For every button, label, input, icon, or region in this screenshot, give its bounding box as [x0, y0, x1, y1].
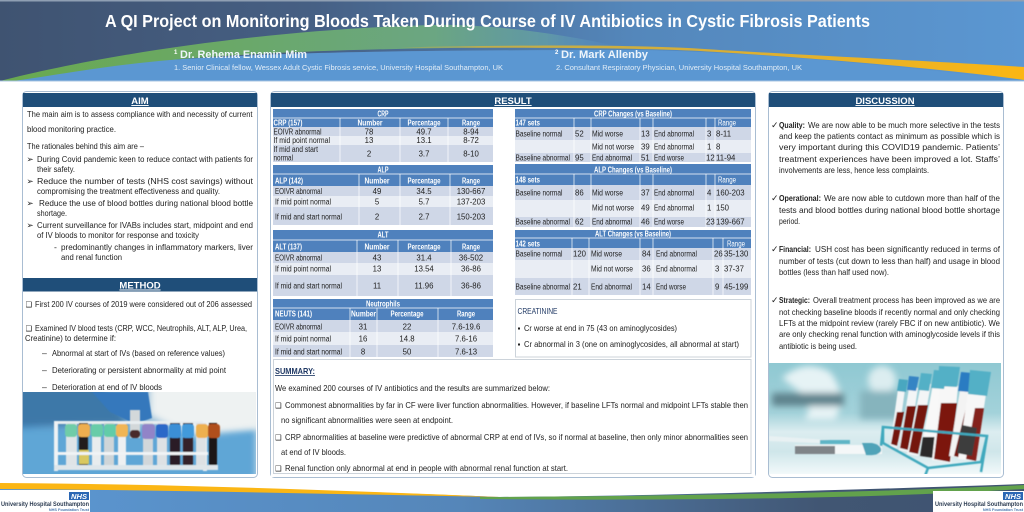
point: strategic: LFTs at the midpoint review (rarely FBC if on new antibiotic). We — [779, 318, 1000, 328]
table: ALT changes: 26 — [714, 250, 723, 258]
method text: ❑ — [26, 300, 32, 309]
table: ALT: 36-502 — [459, 254, 483, 262]
table: CRP changes: 51 — [641, 154, 650, 162]
logo: University Hospital Southampton left: University Hospital Southampton — [1, 502, 89, 508]
aim text: Reduce the number of tests (NHS cost savings) without — [37, 176, 254, 186]
table: Neutrophils: 7.6-16 — [455, 334, 477, 344]
table: ALT changes: Mid not worse — [591, 264, 633, 274]
table: Neutrophils: Range — [457, 310, 475, 318]
author 1 — [174, 49, 503, 72]
table: ALP: 5.7 — [419, 198, 429, 206]
panel: discussion — [768, 92, 1004, 478]
table: Neutrophils: 31 — [359, 322, 367, 332]
aim text: ➢ — [26, 221, 34, 231]
table: CRP changes: 147 sets — [516, 118, 541, 128]
aim text: The rationales behind this aim are – — [27, 141, 144, 151]
aim text: The main aim is to assess compliance with and necessity of current — [27, 109, 253, 119]
table: ALT changes: End worse — [656, 282, 686, 292]
table: CRP changes: 8 — [716, 142, 720, 152]
table: ALP changes: 23 — [706, 218, 715, 226]
table: ALP changes: 139-667 — [716, 218, 745, 226]
table: CRP — [273, 109, 493, 162]
method text: Deteriorating or persistent abnormality at mid point — [52, 365, 227, 375]
table: ALP: ALP (142) — [275, 176, 303, 186]
table: ALT changes: 35-130 — [724, 250, 749, 258]
table: ALP changes: End abnormal — [592, 218, 632, 226]
table: ALP: EOIVR abnormal — [275, 187, 322, 196]
point: operational — [771, 193, 1000, 226]
aim text: ➢ — [26, 177, 34, 187]
header banner — [0, 0, 1024, 82]
table: CRP changes: 52 — [575, 130, 584, 138]
summary box: CRP abnormalities at baseline were predictive of abnormal CRP at end of IVs, so if normal at baseline, then only minor abnormalities seen — [285, 433, 748, 442]
point: financial: USH cost has been significantly reduced in terms of — [815, 244, 1001, 254]
table: CRP changes: 11-94 — [716, 154, 736, 162]
table: ALT: 36-86 — [461, 282, 481, 290]
method text: Deterioration at end of IV bloods — [52, 382, 163, 392]
point: operational: Operational: — [779, 193, 821, 203]
title: A QI Project on Monitoring Bloods Taken During Course of IV Antibiotics in Cystic Fibrosis Patients — [105, 11, 870, 31]
table: Neutrophils: Number — [351, 310, 376, 318]
table: CRP: EOIVR abnormal — [274, 128, 322, 136]
table: ALT: Number — [364, 242, 390, 252]
panel: aim and method — [15, 92, 262, 480]
table: ALP changes: 1 — [707, 204, 711, 212]
table: ALP: 150-203 — [457, 212, 485, 222]
table: ALP — [273, 165, 493, 225]
table: ALT: 13 — [373, 264, 381, 274]
callout: creatinine: Cr worse at end in 75 (43 on aminoglycosides) — [524, 324, 677, 333]
summary box: at end of IV bloods. — [281, 448, 346, 457]
table: CRP: 2 — [367, 150, 371, 158]
point: financial: ✓ — [771, 245, 779, 255]
author 2: Dr. Mark Allenby — [561, 49, 649, 61]
table: CRP changes: End abnormal — [592, 154, 632, 162]
table: ALT changes: End abnormal — [656, 264, 697, 274]
table: ALP changes: Range — [718, 176, 736, 184]
footer band — [0, 483, 1024, 512]
table: ALT changes: 14 — [642, 282, 651, 292]
table: ALT: 43 — [373, 254, 381, 262]
summary box: Commonest abnormalities by far in CF were liver function abnormalities. However, if baseline LFTs normal and midpoint LFTs stable then — [285, 401, 748, 410]
table: Neutrophils: 22 — [403, 322, 411, 332]
table: ALT changes: ALT Changes (vs Baseline) — [595, 230, 671, 238]
summary box: SUMMARY: — [275, 367, 315, 376]
logo: University Hospital Southampton right: NHS Foundation Trust — [983, 508, 1024, 512]
author 2: 2 — [555, 50, 559, 56]
table: CRP changes: Range — [718, 118, 736, 128]
table: Neutrophils: Percentage — [390, 310, 424, 318]
method text: ❑ — [26, 324, 32, 333]
table: Neutrophils: 7.6-19.6 — [452, 322, 480, 332]
point: quality: treatment experiences have been improved a lot. Staffs’ — [779, 154, 1000, 164]
table: CRP: 8-72 — [463, 136, 479, 145]
logo: University Hospital Southampton right — [933, 491, 1024, 512]
table: ALT: If mid point normal — [275, 264, 331, 274]
point: quality: ✓ — [771, 121, 779, 131]
table: ALP: If mid point normal — [275, 198, 331, 206]
aim heading: AIM — [131, 96, 149, 107]
point: quality: We are now able to be much more selective in the tests — [808, 120, 1001, 130]
table: CRP: If mid and start — [274, 145, 319, 154]
table: ALP changes: 86 — [575, 188, 584, 198]
table: CRP: 49.7 — [416, 128, 432, 136]
table: ALP: 2.7 — [419, 212, 429, 222]
table: ALT changes: 21 — [573, 282, 582, 292]
logo: University Hospital Southampton left: NHS Foundation Trust — [49, 508, 90, 512]
summary box: no significant abnormalities were seen at endpoint. — [281, 416, 453, 425]
logo: University Hospital Southampton left: NHS — [71, 494, 87, 501]
point: quality: involvements are less, hence less complaints. — [779, 165, 929, 175]
table: ALP: 5 — [375, 198, 380, 206]
table: ALT: 36-86 — [461, 264, 481, 274]
author 2: 2. Consultant Respiratory Physician, University Hospital Southampton, UK — [556, 63, 802, 72]
point: financial: number of tests (cut down to less than half) and usage in blood — [779, 256, 1000, 266]
table: Neutrophils: EOIVR abnormal — [275, 322, 322, 332]
method text: – — [42, 382, 47, 392]
table: CRP: Range — [462, 118, 480, 128]
method heading: METHOD — [119, 280, 161, 292]
aim text: of IV bloods to monitor for response and toxicity — [37, 230, 200, 240]
summary box — [274, 360, 751, 474]
callout: creatinine: Cr abnormal in 3 (one on aminoglycosides, all abnormal at start) — [524, 340, 739, 349]
point: financial: bottles (less than half used now). — [779, 267, 889, 277]
table: CRP: Number — [358, 118, 382, 128]
table: Neutrophils: 16 — [359, 334, 367, 344]
callout: creatinine — [516, 300, 751, 357]
table: CRP changes: Mid not worse — [592, 142, 634, 152]
table: CRP: 8-10 — [463, 150, 479, 158]
aim text — [26, 109, 254, 262]
discussion heading: DISCUSSION — [855, 96, 915, 107]
panel: result — [270, 92, 756, 478]
table: ALP changes: Baseline normal — [516, 188, 563, 198]
table: ALT: Range — [462, 242, 480, 252]
table: CRP changes: End abnormal — [654, 142, 694, 152]
logo: University Hospital Southampton left — [0, 490, 90, 512]
table: ALT: ALT (137) — [275, 242, 302, 252]
table: ALT — [273, 230, 493, 296]
table: ALT: 13.54 — [414, 264, 434, 274]
table: ALT: 11 — [373, 282, 381, 290]
table: ALT changes: Baseline abnormal — [516, 282, 570, 292]
point: financial — [771, 244, 1001, 277]
point: operational: period. — [779, 216, 800, 226]
table: ALP: Range — [462, 176, 480, 186]
table: ALP changes: Mid not worse — [592, 204, 634, 212]
table: Neutrophils: NEUTS (141) — [275, 310, 312, 318]
table: ALP changes: End worse — [654, 218, 684, 226]
table: CRP changes: 8-11 — [716, 130, 731, 138]
result heading — [271, 93, 755, 107]
aim text: Reduce the use of blood bottles during national blood bottle — [39, 198, 253, 208]
table: ALT: ALT — [378, 230, 389, 240]
table: CRP changes — [515, 109, 751, 162]
table: CRP changes: Baseline normal — [516, 130, 563, 138]
table: ALP: 137-203 — [457, 198, 485, 206]
table: ALP changes: End abnormal — [654, 188, 694, 198]
table: ALP changes: 148 sets — [516, 176, 541, 184]
table: ALT changes: 84 — [642, 250, 651, 258]
aim text: compromising the treatment effectiveness and quality. — [37, 186, 220, 196]
summary box: ❑ — [275, 401, 282, 410]
table: ALP changes: End abnormal — [654, 204, 694, 212]
table: ALP: If mid and start normal — [275, 212, 342, 222]
summary box: We examined 200 courses of IV antibiotics and the results are summarized below: — [275, 384, 550, 393]
table: ALP: Number — [364, 176, 390, 186]
point: quality: very important during this COVID19 pandemic. Patients’ — [779, 142, 1000, 152]
author 1: Dr. Rehema Enamin Mim — [180, 49, 307, 61]
table: CRP: Percentage — [408, 118, 441, 128]
point: strategic — [771, 295, 1001, 351]
table: CRP: CRP — [378, 110, 388, 118]
table: Neutrophils: 14.8 — [399, 334, 415, 344]
table: ALT changes: 120 — [573, 250, 587, 258]
point: strategic: Strategic: — [779, 295, 810, 305]
point: strategic: are only checking renal function with aminoglycoside levels if this — [779, 329, 1001, 339]
discussion heading — [769, 93, 1003, 107]
table: ALT changes: 36 — [642, 264, 651, 274]
table: ALT changes: 9 — [715, 282, 719, 292]
table: ALT changes: End abnormal — [591, 282, 632, 292]
table: Neutrophils: 7.6-13 — [455, 348, 477, 356]
point: strategic: Overall treatment process has been improved as we are — [813, 295, 1000, 305]
point: operational: tests and blood bottles during national blood bottle shortage — [779, 205, 1000, 215]
aim text: predominantly changes in inflammatory markers, liver — [61, 242, 253, 252]
table: ALT changes: 45-199 — [724, 282, 748, 292]
point: strategic: not checking baseline bloods if recently normal and only checking — [779, 307, 1000, 317]
table: CRP changes: Baseline abnormal — [516, 154, 570, 162]
table: CRP: 3.7 — [419, 150, 429, 158]
aim text: and renal function — [61, 252, 122, 262]
table: ALP changes: Baseline abnormal — [516, 218, 570, 226]
table: ALT: EOIVR abnormal — [275, 254, 322, 262]
table: ALT changes — [515, 230, 751, 295]
point: quality: Quality: — [779, 120, 805, 130]
table: CRP: 78 — [365, 128, 373, 136]
method text: First 200 IV courses of 2019 were considered out of 206 assessed — [35, 299, 252, 309]
table: ALP: 2 — [375, 212, 379, 222]
table: CRP: 8-94 — [463, 128, 479, 136]
table: CRP changes: 1 — [707, 142, 711, 152]
point: quality — [771, 120, 1001, 175]
point: strategic: ✓ — [771, 296, 779, 306]
point: operational: ✓ — [771, 194, 779, 204]
method text: – — [42, 365, 47, 375]
aim heading — [23, 93, 257, 107]
table: CRP changes: 12 — [706, 154, 715, 162]
table: ALP changes: 160-203 — [716, 188, 745, 198]
table: CRP: CRP (157) — [274, 118, 303, 128]
table: CRP changes: CRP Changes (vs Baseline) — [594, 110, 672, 118]
table: CRP: If mid point normal — [274, 136, 330, 145]
summary box: ❑ — [275, 433, 282, 442]
aim text: ➢ — [26, 155, 34, 165]
point: strategic: antibiotic is being used. — [779, 341, 857, 351]
summary box: Renal function only abnormal at end in people with abnormal renal function at start. — [285, 464, 568, 473]
table: CRP changes: 3 — [707, 130, 711, 138]
method heading — [23, 278, 257, 292]
table: Neutrophils: 8 — [361, 348, 365, 356]
table: ALP changes — [515, 164, 751, 227]
method text — [25, 299, 252, 392]
table: CRP changes: Mid worse — [592, 130, 623, 138]
table: CRP changes: 95 — [575, 154, 584, 162]
point: quality: and keep the patients contact as minimum as possible which is — [779, 131, 1001, 141]
table: ALP changes: 46 — [641, 218, 650, 226]
table: CRP: normal — [274, 154, 293, 162]
author 1: 1 — [174, 50, 178, 56]
author 1: 1. Senior Clinical fellow, Wessex Adult Cystic Fibrosis service, University Hospital Southampton, UK — [174, 63, 503, 72]
result heading: RESULT — [494, 96, 532, 107]
table: ALP changes: 4 — [707, 188, 712, 198]
aim text: shortage. — [37, 208, 67, 218]
table: CRP changes: End abnormal — [654, 130, 694, 138]
table: ALT changes: End abnormal — [656, 250, 697, 258]
summary box: ❑ — [275, 464, 282, 473]
method text: Creatinine) to determine if: — [25, 333, 116, 343]
table: ALT changes: Range — [727, 240, 745, 248]
table: ALP: 34.5 — [416, 187, 432, 196]
table: ALT changes: 37-37 — [724, 264, 744, 274]
table: ALT changes: Baseline normal — [516, 250, 563, 258]
table: Neutrophils: 50 — [403, 348, 412, 356]
table: CRP: 13.1 — [416, 136, 432, 145]
photo: blood tubes in teal rack — [769, 363, 1001, 476]
table: Neutrophils: If mid point normal — [275, 334, 331, 344]
method text: Examined IV blood tests (CRP, WCC, Neutrophils, ALT, ALP, Urea, — [35, 323, 247, 333]
table: ALP: Percentage — [408, 176, 441, 186]
method text: Abnormal at start of IVs (based on reference values) — [52, 348, 225, 358]
point: financial: Financial: — [779, 244, 811, 254]
table: ALT: If mid and start normal — [275, 282, 342, 290]
table: ALP changes: 62 — [575, 218, 584, 226]
aim text: During Covid pandemic keen to reduce contact with patients for — [37, 154, 253, 164]
table: ALP changes: 150 — [716, 204, 730, 212]
aim text: Current surveillance for IVABs includes start, midpoint and end — [37, 220, 253, 230]
table: CRP: 13 — [365, 136, 373, 145]
table: ALT: 31.4 — [416, 254, 432, 262]
table: ALT changes: Mid worse — [591, 250, 622, 258]
logo: University Hospital Southampton right: NHS — [1005, 494, 1021, 501]
table: Neutrophils: Neutrophils — [366, 300, 401, 308]
table: ALT changes: 142 sets — [516, 240, 541, 248]
author 2 — [555, 49, 802, 72]
table: ALP: 49 — [373, 187, 381, 196]
table: ALP changes: 37 — [641, 188, 650, 198]
aim text: blood monitoring practice. — [27, 124, 116, 134]
table: ALP changes: Mid worse — [592, 188, 623, 198]
callout: creatinine: CREATININE — [518, 307, 558, 316]
photo: blood tubes in white rack — [23, 392, 256, 474]
table: ALT: Percentage — [408, 242, 441, 252]
table: CRP changes: End worse — [654, 154, 684, 162]
point: operational: We are now able to cutdown more than half of the — [824, 193, 1000, 203]
aim text: their safety. — [37, 164, 75, 174]
table: Neutrophils: If mid and start normal — [275, 348, 342, 356]
table: ALP changes: ALP Changes (vs Baseline) — [594, 166, 672, 174]
table: ALP: ALP — [378, 166, 388, 174]
table: ALP: 130-667 — [457, 187, 485, 196]
table: Neutrophils — [273, 299, 493, 357]
aim text: ➢ — [26, 199, 34, 209]
table: CRP changes: 39 — [641, 142, 650, 152]
table: ALT changes: 3 — [715, 264, 719, 274]
method text: – — [42, 348, 47, 358]
table: ALP changes: 49 — [641, 204, 650, 212]
table: ALT: 11.96 — [415, 282, 433, 290]
aim text: - — [54, 242, 57, 252]
table: CRP changes: 13 — [641, 130, 650, 138]
